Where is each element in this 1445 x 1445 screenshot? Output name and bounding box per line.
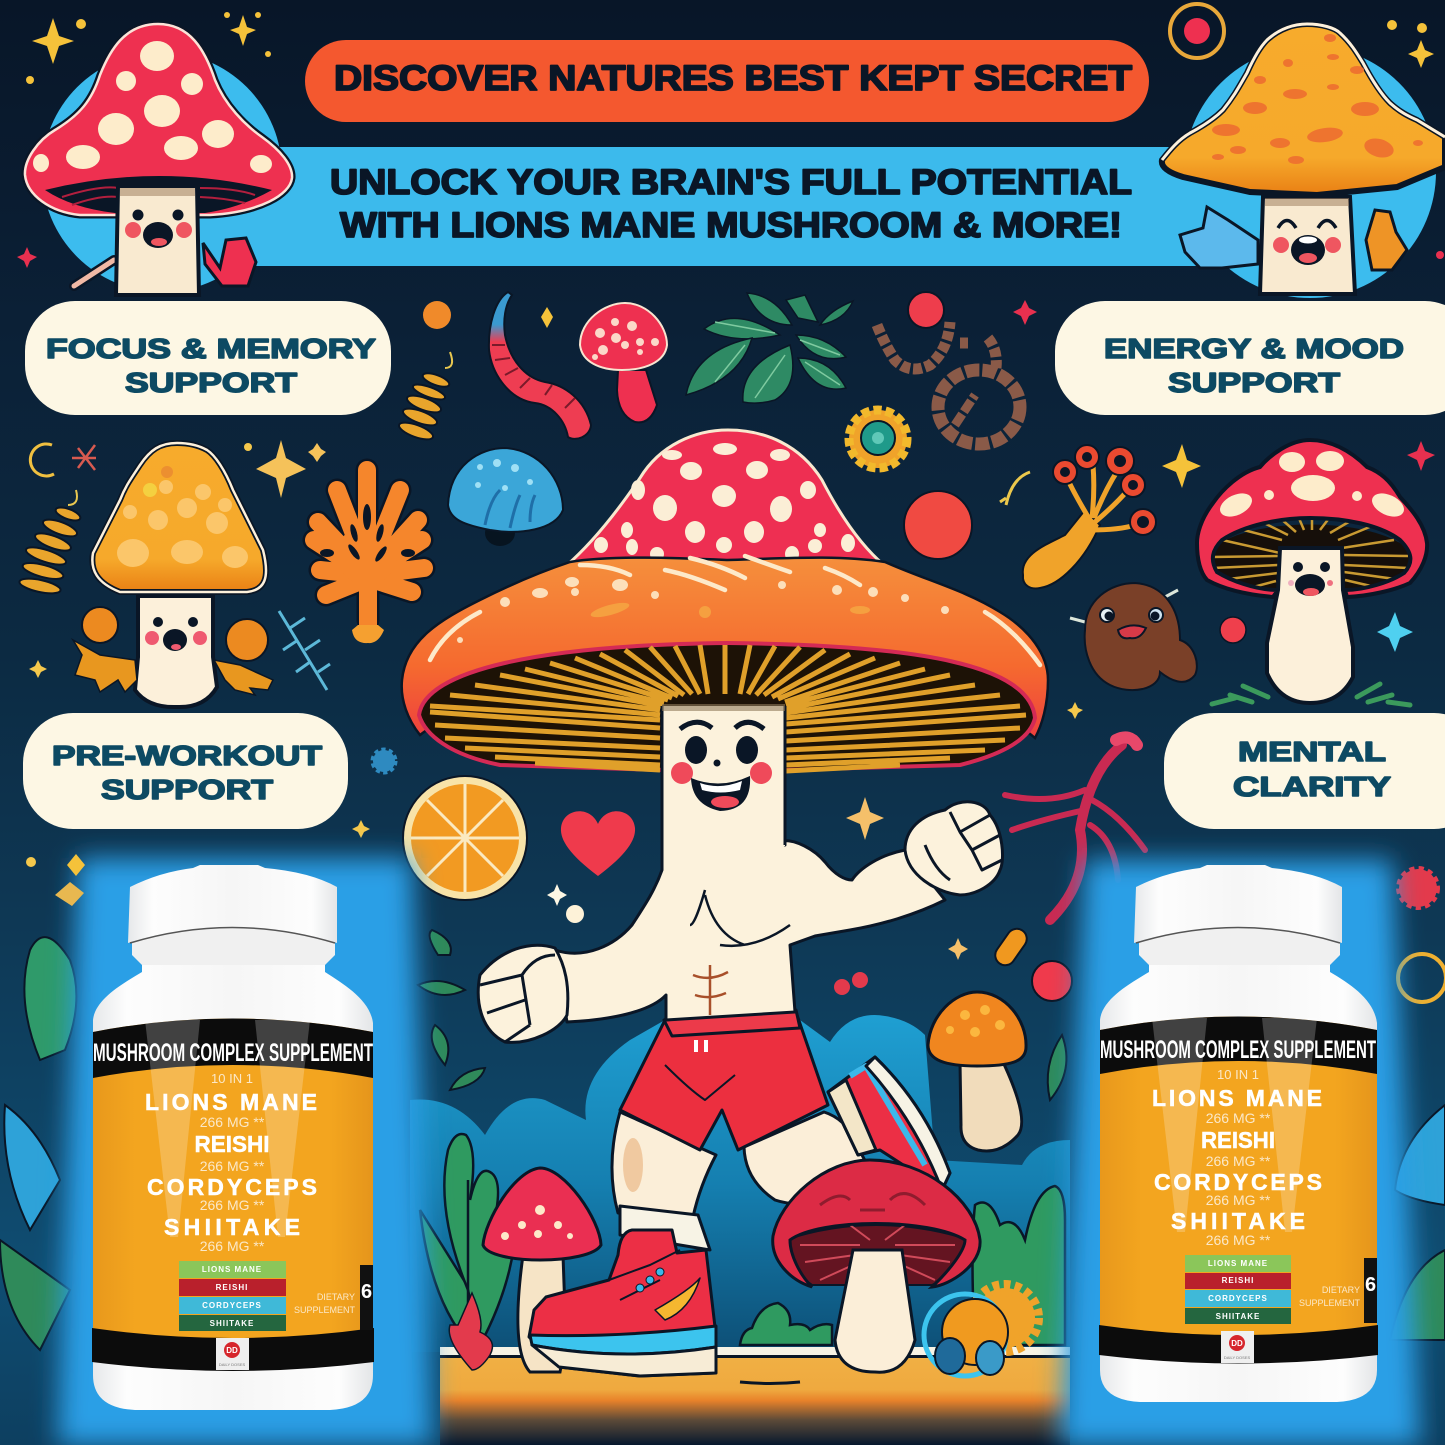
icon: red berries and capsule xyxy=(834,925,1072,1001)
icon: spiral left xyxy=(18,490,82,596)
bottle right: LIONS MANE xyxy=(1152,1085,1322,1111)
bottle right: 266 MG ** xyxy=(1206,1153,1271,1169)
icon: sunflower and ball xyxy=(924,1288,1035,1376)
icon: small red mushroom xyxy=(580,303,667,422)
icon: brown bead worm xyxy=(877,322,1020,444)
blue circles behind top mushrooms xyxy=(42,46,1436,298)
icon: orange coral xyxy=(314,470,424,643)
icon: red mushroom in front xyxy=(773,1160,980,1372)
icon: left small mushroom xyxy=(483,1168,601,1372)
icon: orange mushroom right of runner xyxy=(928,992,1026,1151)
label: pre-workout: SUPPORT xyxy=(101,774,273,805)
blue glow left xyxy=(58,858,432,1445)
subheading: UNLOCK YOUR BRAIN'S FULL POTENTIAL xyxy=(330,163,1132,202)
icon: orange slice xyxy=(403,776,527,900)
clouds backdrop xyxy=(410,1015,1070,1352)
bottle left: SUPPLEMENT xyxy=(294,1305,356,1315)
left fist xyxy=(478,945,568,1042)
bottle right: 6 xyxy=(1365,1274,1376,1296)
label: energy and mood: SUPPORT xyxy=(1168,367,1340,398)
bottle right: SHIITAKE xyxy=(1171,1208,1305,1234)
bottle left: DD xyxy=(226,1346,238,1355)
right fist xyxy=(905,802,1003,895)
figure: running mushroom xyxy=(478,706,1003,1376)
bottle left: MUSHROOM COMPLEX SUPPLEMENT xyxy=(93,1039,373,1067)
chest lines xyxy=(690,890,790,946)
main mushroom cap xyxy=(402,430,1048,771)
label: energy and mood: ENERGY & MOOD xyxy=(1104,333,1404,364)
icon: blue mushroom xyxy=(448,448,563,546)
bottle left: 10 IN 1 xyxy=(211,1071,253,1086)
icon: mid-left orange mushroom xyxy=(73,443,273,707)
bottle right: SUPPLEMENT xyxy=(1299,1298,1361,1308)
bottle right xyxy=(1099,865,1378,1402)
bottle left: 266 MG ** xyxy=(200,1114,265,1130)
icon: brown blob character xyxy=(1070,583,1197,690)
front leg xyxy=(612,1112,716,1217)
label: energy and mood xyxy=(1055,301,1445,415)
icon: decorative moon, ring and twig xyxy=(30,4,1445,1002)
torso and arms xyxy=(555,706,945,1022)
bottle right: DIETARY xyxy=(1322,1285,1360,1295)
icon: heart xyxy=(561,811,635,876)
blue headline band xyxy=(200,147,1250,266)
gold sparkles above left bottle xyxy=(55,854,85,906)
back shoe xyxy=(828,1057,950,1190)
bottle left: 266 MG ** xyxy=(200,1238,265,1254)
bottle right: REISHI xyxy=(1201,1127,1275,1153)
bottle left: SHIITAKE xyxy=(210,1319,254,1328)
bottle right: 266 MG ** xyxy=(1206,1192,1271,1208)
bottle left: REISHI xyxy=(216,1283,248,1292)
label: pre-workout xyxy=(23,713,348,829)
bottle left: CORDYCEPS xyxy=(202,1301,262,1310)
icon: red tentacles xyxy=(1005,737,1145,920)
bottle left: REISHI xyxy=(194,1131,270,1157)
bottle left: LIONS MANE xyxy=(202,1265,262,1274)
icon: cordyceps xyxy=(1023,445,1156,588)
orange headline banner: DISCOVER NATURES BEST KEPT SECRET xyxy=(334,59,1132,98)
front shoe xyxy=(529,1230,716,1376)
subheading xyxy=(330,163,1132,245)
icon: low shrub xyxy=(740,1303,832,1345)
bottle left: DAILY DOSES xyxy=(219,1362,245,1367)
side foliage right xyxy=(1390,1105,1445,1340)
icon: spiral top xyxy=(397,352,452,443)
label: focus and memory: SUPPORT xyxy=(125,367,297,398)
icon: top-left red mushroom xyxy=(25,24,292,295)
orange headline banner xyxy=(305,40,1149,122)
side foliage left xyxy=(0,937,76,1350)
label: focus and memory xyxy=(25,301,391,415)
bottle left xyxy=(92,865,374,1410)
main mushroom stem and face xyxy=(662,704,785,870)
label: mental clarity xyxy=(1164,713,1445,829)
icon: small red ball xyxy=(908,292,944,328)
icon: mid-right red mushroom xyxy=(1197,440,1427,705)
label: focus and memory: FOCUS & MEMORY xyxy=(46,333,376,364)
bottle right: LIONS MANE xyxy=(1208,1259,1268,1268)
bottle left: CORDYCEPS xyxy=(147,1174,317,1200)
bottle left: DIETARY xyxy=(317,1292,355,1302)
icon: foliage right of runner xyxy=(972,1186,1065,1345)
bottle right: 266 MG ** xyxy=(1206,1232,1271,1248)
label: pre-workout: PRE-WORKOUT xyxy=(52,740,322,771)
icon: small red ball right xyxy=(1220,617,1246,643)
bottle right: DD xyxy=(1231,1339,1243,1348)
icon: foliage left of runner xyxy=(420,1134,517,1345)
shorts xyxy=(620,1010,828,1150)
bottle right: SHIITAKE xyxy=(1216,1312,1260,1321)
bottle right: 266 MG ** xyxy=(1206,1110,1271,1126)
label: mental clarity: CLARITY xyxy=(1233,771,1391,802)
blue glow right xyxy=(1060,860,1420,1445)
bottle left: 266 MG ** xyxy=(200,1197,265,1213)
icon: flower xyxy=(849,410,907,468)
sock xyxy=(620,1206,710,1250)
icon: sparkles xyxy=(17,12,1444,960)
bottle left: 266 MG ** xyxy=(200,1158,265,1174)
bottle left: 6 xyxy=(361,1281,372,1303)
bottle left: LIONS MANE xyxy=(145,1089,317,1115)
bottle right: REISHI xyxy=(1222,1276,1254,1285)
bottle right: 10 IN 1 xyxy=(1217,1067,1259,1082)
bottle right: CORDYCEPS xyxy=(1208,1294,1268,1303)
icon: green leaves xyxy=(686,293,853,403)
label: mental clarity: MENTAL xyxy=(1238,736,1386,767)
ground stripe xyxy=(440,1347,1070,1445)
bottle right: CORDYCEPS xyxy=(1154,1169,1322,1195)
icon: yellow squiggle xyxy=(1000,472,1030,505)
icon: side leaves xyxy=(418,930,1066,1100)
icon: red plant xyxy=(449,1293,492,1370)
subheading: WITH LIONS MANE MUSHROOM & MORE! xyxy=(340,206,1122,245)
icon: striped worm xyxy=(489,292,591,439)
icon: top-right orange mushroom xyxy=(1162,24,1445,294)
icon: red ball xyxy=(904,491,972,559)
bottle right: DAILY DOSES xyxy=(1224,1355,1250,1360)
bottle left: SHIITAKE xyxy=(164,1214,300,1240)
back leg xyxy=(744,1112,870,1204)
abs xyxy=(693,965,728,1015)
